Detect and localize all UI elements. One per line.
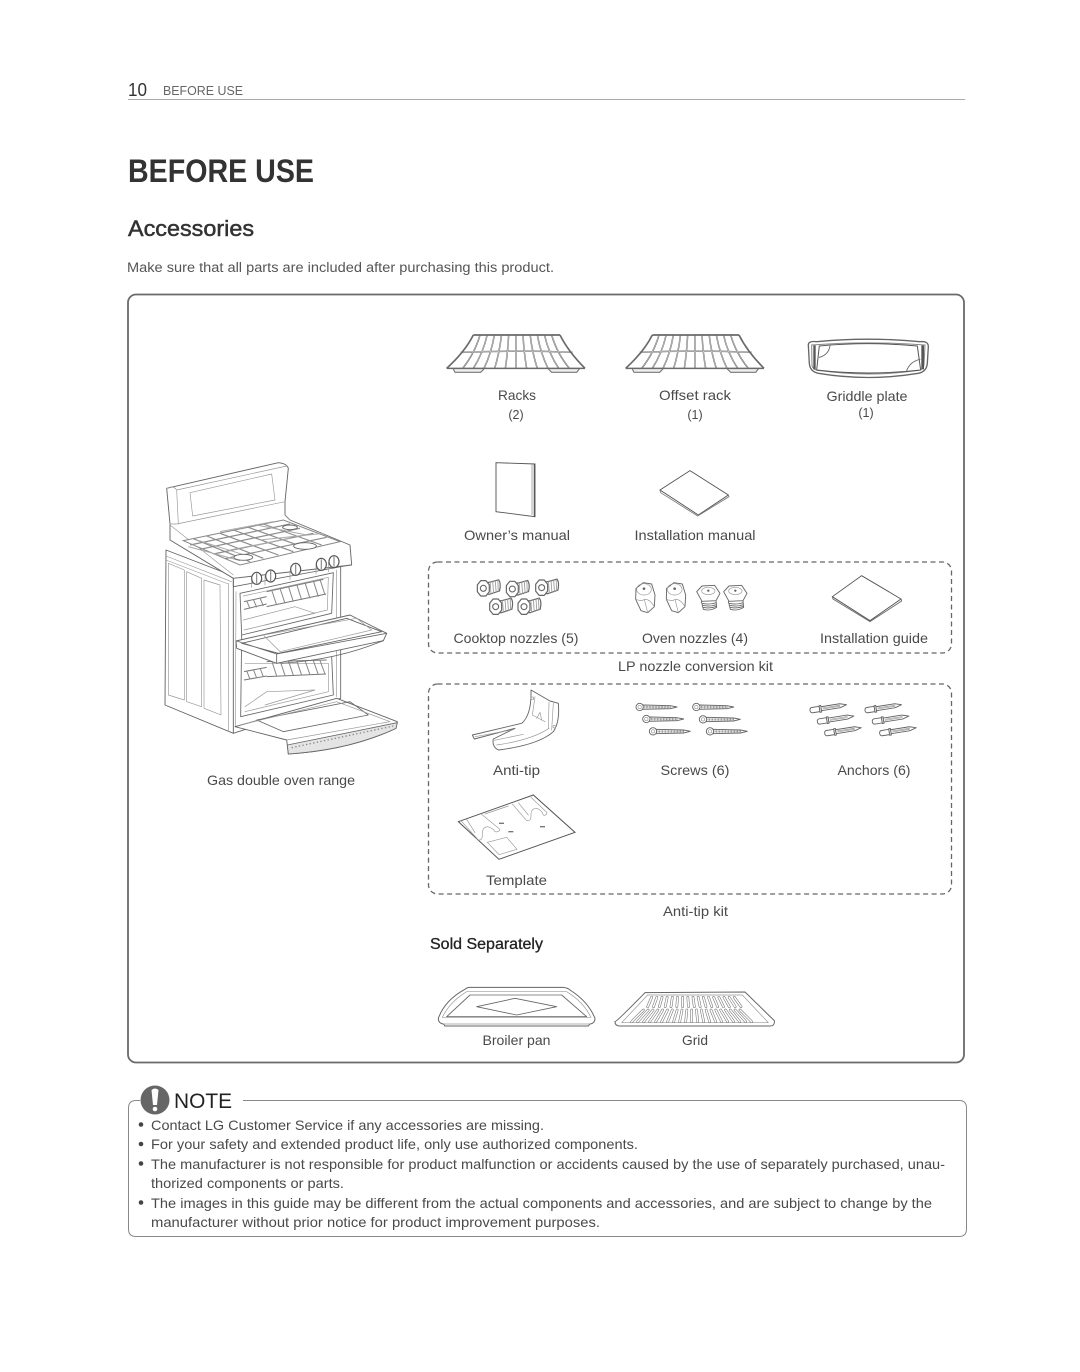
heading: sold separately: Sold Separately (430, 936, 543, 953)
icon: anchors (809, 701, 917, 737)
icon: template (458, 795, 575, 859)
label: anti-tip: Anti-tip (493, 762, 540, 778)
open lower door (235, 698, 397, 754)
icon: grid (615, 992, 774, 1026)
dashed group: LP nozzle conversion kit (428, 562, 952, 653)
label: offset rack: Offset rack (659, 387, 732, 403)
label: owner's manual: Owner’s manual (464, 527, 570, 543)
section heading: accessories: Accessories (128, 216, 254, 241)
title: BEFORE USE (128, 153, 314, 189)
icon: folded manual (660, 471, 729, 516)
icon: rack (447, 335, 585, 372)
icon: installation guide (832, 576, 902, 622)
item: grid (615, 992, 774, 1048)
item: racks (447, 335, 585, 422)
running header: BEFORE USE (163, 84, 243, 98)
note text: For your safety and extended product life, only use authorized components. (151, 1136, 638, 1152)
intro text: Make sure that all parts are included after purchasing this product. (127, 260, 554, 275)
label: racks: Racks (498, 387, 536, 403)
icon: broiler pan (438, 987, 595, 1026)
quantity: griddle plate: (1) (858, 406, 874, 420)
icon: screws (636, 703, 747, 735)
note text: thorized components or parts. (151, 1175, 344, 1191)
dashed group: anti-tip kit (428, 684, 952, 894)
side body (165, 550, 233, 733)
open upper door (236, 615, 387, 663)
icon: gas double oven range (165, 463, 397, 754)
note heading: NOTE (174, 1090, 232, 1113)
label: broiler pan: Broiler pan (482, 1032, 550, 1048)
caption: anti-tip kit: Anti-tip kit (663, 903, 728, 919)
item: broiler pan (438, 987, 595, 1048)
label: screws: Screws (6) (660, 762, 730, 778)
page number: 10 (128, 80, 147, 100)
note text: The manufacturer is not responsible for product malfunction or accidents caused by the use of separately purchased, unau- (151, 1156, 945, 1172)
label: installation manual: Installation manual (634, 527, 756, 543)
label: oven nozzles: Oven nozzles (4) (642, 630, 748, 646)
label: template: Template (486, 872, 547, 888)
icon: booklet (496, 463, 535, 517)
icon: exclamation (140, 1086, 170, 1114)
note text: Contact LG Customer Service if any accessories are missing. (151, 1117, 544, 1133)
note text: manufacturer without prior notice for product improvement purposes. (151, 1214, 600, 1230)
quantity: racks: (2) (508, 408, 524, 422)
note text (151, 1117, 945, 1230)
icon: oven nozzles (636, 583, 747, 613)
note text: The images in this guide may be different from the actual components and accessories, and are subject to change by the (151, 1195, 932, 1211)
icon: offset rack (626, 335, 764, 372)
label: cooktop nozzles: Cooktop nozzles (5) (454, 630, 578, 646)
label: grid: Grid (682, 1032, 708, 1048)
quantity: offset rack: (1) (687, 408, 703, 422)
knobs (252, 556, 339, 584)
label: installation guide: Installation guide (820, 630, 928, 646)
icon: anti-tip bracket (472, 690, 559, 750)
item: owner's manual (464, 463, 570, 543)
item: griddle plate (808, 339, 928, 420)
label: anchors: Anchors (6) (838, 762, 910, 778)
label: griddle plate: Griddle plate (826, 388, 908, 404)
note bullets (139, 1122, 143, 1205)
icon: cooktop nozzles (477, 579, 559, 614)
item: offset rack (626, 335, 764, 422)
label: gas double oven range: Gas double oven range (207, 772, 355, 788)
page header (128, 80, 965, 100)
panel: accessories (128, 294, 964, 1062)
icon: griddle plate (808, 339, 928, 377)
item: installation manual (634, 471, 756, 543)
note box (128, 1086, 966, 1236)
caption: LP nozzle conversion kit: LP nozzle conversion kit (618, 658, 773, 674)
